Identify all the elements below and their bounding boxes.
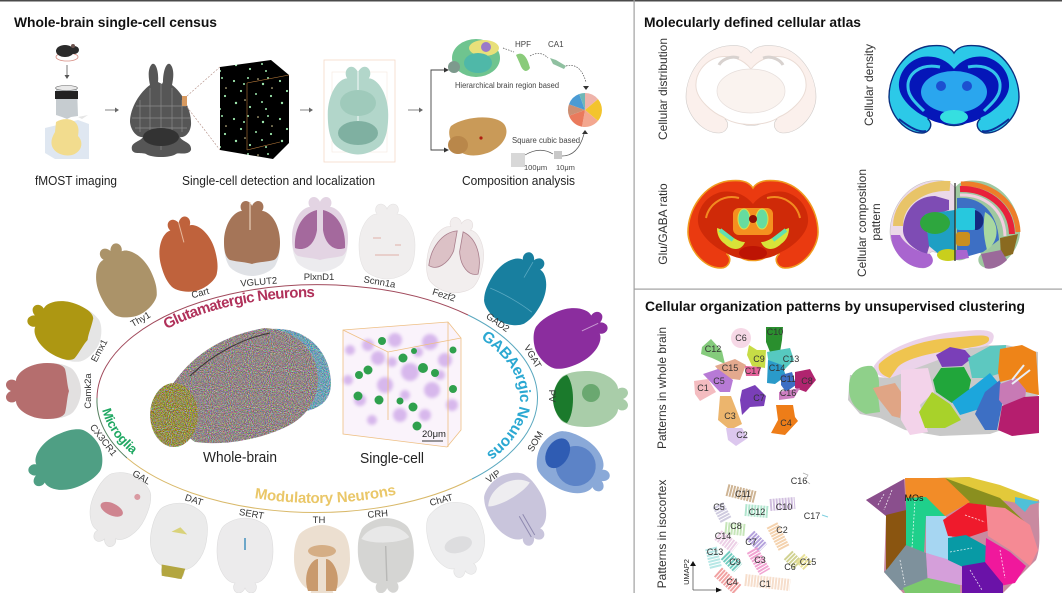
label: hierarchical brain region based: Hierarchical brain region based <box>455 81 559 90</box>
heading: Microglia: Microglia <box>102 408 136 454</box>
brain: Camk2a <box>6 363 81 419</box>
cluster plot: whole brain UMAP: C7 <box>753 393 765 403</box>
label: VGAT: VGAT <box>521 343 543 371</box>
cluster plot: whole brain UMAP: C15 <box>722 363 738 373</box>
label: Emx1: Emx1 <box>89 338 110 364</box>
cluster plot: whole brain UMAP: C8 <box>801 376 813 386</box>
cluster plot: whole brain UMAP: C13 <box>783 354 799 364</box>
cluster plot: whole brain UMAP: C17 <box>745 366 761 376</box>
label: VIP: VIP <box>484 468 503 486</box>
cluster plot: isocortex UMAP: C2 <box>776 525 788 535</box>
cluster plot: whole brain UMAP: C11 <box>780 374 796 384</box>
cluster plot: whole brain UMAP: C10 <box>767 327 783 337</box>
label: cellular distribution: Cellular distribution <box>656 38 670 140</box>
brain: Scnn1a <box>359 204 415 279</box>
brain: SOM <box>527 422 620 508</box>
icon: HPF and CA1 regions <box>503 40 586 82</box>
panel: cellular organization patterns <box>645 298 1040 593</box>
label: ChAT: ChAT <box>429 492 454 509</box>
cluster plot: isocortex UMAP: C11 <box>735 489 751 499</box>
icon: fMOST objective and sample block <box>45 86 89 159</box>
brain: VGAT <box>525 295 616 377</box>
cluster plot: isocortex UMAP: C12 <box>749 507 765 517</box>
label: Fezf2: Fezf2 <box>431 287 457 305</box>
cluster plot: isocortex UMAP: C13 <box>707 547 723 557</box>
icon: cube crops <box>511 134 584 172</box>
cluster plot: whole brain UMAP: C14 <box>769 363 785 373</box>
cluster plot: isocortex UMAP: C3 <box>754 555 766 565</box>
cluster plot: isocortex UMAP: C5 <box>713 502 725 512</box>
brain: DAT <box>144 499 212 582</box>
arc: GABAergic section <box>468 315 537 479</box>
icon: translucent green brain in box <box>324 60 395 162</box>
coronal map: Glu/GABA ratio <box>688 181 818 268</box>
label: cellular composition pattern: pattern <box>869 203 883 241</box>
arrow: imaging to detection <box>105 108 119 112</box>
cluster plot: isocortex UMAP: C9 <box>729 557 741 567</box>
arrow: mouse to microscope <box>64 65 70 79</box>
label: square cubic based: Square cubic based <box>512 136 580 145</box>
caption: Whole-brain: Whole-brain <box>203 449 277 466</box>
label: PlxnD1: PlxnD1 <box>304 272 334 283</box>
label: GAD2: GAD2 <box>484 311 511 335</box>
icon: cube crops: 100μm <box>524 163 547 172</box>
label: PV: PV <box>546 390 557 403</box>
label: patterns in isocortex: Patterns in isocortex <box>655 480 669 588</box>
brain: Cart <box>150 211 224 298</box>
label: TH: TH <box>313 515 325 526</box>
icon: cube crops: 10μm <box>556 163 575 172</box>
label: VGLUT2: VGLUT2 <box>240 275 278 290</box>
caption: fMOST imaging: fMOST imaging <box>35 174 117 188</box>
panel: whole-brain single-cell census <box>6 14 628 593</box>
pie chart: composition <box>568 93 602 127</box>
brain: VGLUT2 <box>224 201 280 276</box>
cluster plot: isocortex UMAP: C1 <box>759 579 771 589</box>
cluster plot: whole brain UMAP: C1 <box>697 383 709 393</box>
label: Glu/GABA ratio: Glu/GABA ratio <box>656 183 670 265</box>
brain: CX3CR1 <box>20 421 111 503</box>
brain: GAL <box>77 464 159 555</box>
arrow: to composition analysis <box>408 108 423 112</box>
cluster plot: whole brain UMAP <box>694 327 816 446</box>
label: patterns in whole brain: Patterns in whole brain <box>655 327 669 449</box>
icon: hierarchical region brain <box>448 39 500 77</box>
label: Thy1: Thy1 <box>129 310 153 330</box>
arrows: into pie chart <box>582 86 589 134</box>
region map: isocortex flatmap <box>866 477 1040 593</box>
heading: Glutamatergic Neurons: Glutamatergic Neurons <box>164 289 314 328</box>
arc: microglia section <box>97 398 127 458</box>
label: Camk2a: Camk2a <box>83 373 94 409</box>
caption: single-cell detection: Single-cell detection and localization <box>182 174 375 188</box>
brain: SERT <box>217 518 273 593</box>
brain: VIP <box>475 463 561 556</box>
cluster plot: whole brain UMAP: C3 <box>724 411 736 421</box>
coronal map: cellular density <box>889 46 1019 133</box>
heading: GABAergic Neurons: GABAergic Neurons <box>483 332 531 459</box>
cluster plot: whole brain UMAP: C12 <box>705 344 721 354</box>
image: whole-brain cell point cloud <box>150 328 331 447</box>
cluster plot: isocortex UMAP <box>707 473 828 590</box>
label: CX3CR1: CX3CR1 <box>87 422 119 459</box>
cluster plot: isocortex UMAP: C17 <box>804 511 820 521</box>
cluster plot: isocortex UMAP: C10 <box>776 502 792 512</box>
region map: isocortex flatmap: MOs <box>904 493 924 503</box>
label: SERT: SERT <box>238 507 265 522</box>
label: Cart: Cart <box>190 286 211 301</box>
heading: molecular atlas: Molecularly defined cellular atlas <box>644 14 861 30</box>
label: cellular density: Cellular density <box>862 44 876 126</box>
label: cellular composition pattern <box>855 169 883 277</box>
coronal map: cellular distribution <box>686 46 816 133</box>
label: CRH: CRH <box>367 508 389 521</box>
arrow: branching connector <box>431 68 449 152</box>
brain: PlxnD1 <box>292 197 348 272</box>
axes: UMAP: UMAP2 <box>682 559 691 585</box>
heading: organization patterns: Cellular organization patterns by unsupervised clustering <box>645 298 1025 314</box>
label: cellular composition pattern: Cellular composition <box>855 169 869 277</box>
image: single-cell volume <box>343 322 461 447</box>
panel: molecularly defined cellular atlas <box>644 14 1020 277</box>
cluster plot: isocortex UMAP: C14 <box>715 531 731 541</box>
region map: sagittal whole brain <box>848 330 1039 436</box>
cluster plot: isocortex UMAP: C6 <box>784 562 796 572</box>
cluster plot: isocortex UMAP: C15 <box>800 557 816 567</box>
icon: grayscale whole brain <box>130 64 191 157</box>
arrow: detection to reconstruction <box>300 108 313 112</box>
cluster plot: whole brain UMAP: C9 <box>753 354 765 364</box>
image: black detection volume with cells <box>220 60 289 159</box>
cluster plot: whole brain UMAP: C6 <box>735 333 747 343</box>
heading: whole-brain census: Whole-brain single-cell census <box>14 14 217 30</box>
cluster plot: isocortex UMAP: C8 <box>730 521 742 531</box>
icon: HPF and CA1 regions: HPF <box>515 40 531 49</box>
brain: PV <box>553 371 628 427</box>
cluster plot: isocortex UMAP: C7 <box>745 537 757 547</box>
heading: Modulatory Neurons: Modulatory Neurons <box>255 487 396 506</box>
label: SOM: SOM <box>526 430 546 454</box>
icon: HPF and CA1 regions: CA1 <box>548 40 564 49</box>
cluster plot: whole brain UMAP: C4 <box>780 418 792 428</box>
brain: Thy1 <box>83 235 165 326</box>
cluster plot: isocortex UMAP: C16 <box>791 476 807 486</box>
brain: Emx1 <box>19 288 110 370</box>
cluster plot: whole brain UMAP: C2 <box>736 430 748 440</box>
coronal map: cellular composition pattern <box>890 181 1020 269</box>
scale bar: 20 micrometres: 20μm <box>422 429 446 440</box>
brain: GAD2 <box>475 242 561 335</box>
caption: composition analysis: Composition analysis <box>462 174 575 188</box>
brain: ChAT <box>420 496 494 583</box>
cluster plot: whole brain UMAP: C16 <box>780 388 796 398</box>
brain: TH <box>294 525 350 593</box>
cluster plot: whole brain UMAP: C5 <box>713 376 725 386</box>
caption: Single-cell: Single-cell <box>360 450 424 467</box>
icon: golden brain <box>448 117 506 155</box>
zoom lines to cube <box>187 67 220 150</box>
brain: Fezf2 <box>422 214 490 297</box>
icon: mouse on stage <box>56 44 79 61</box>
arc: modulatory section <box>127 458 472 513</box>
label: DAT: DAT <box>183 493 204 509</box>
brain: CRH <box>357 517 415 593</box>
label: GAL: GAL <box>130 468 152 487</box>
cluster plot: isocortex UMAP: C4 <box>726 577 738 587</box>
arc: glutamatergic section <box>97 285 468 398</box>
label: Scnn1a: Scnn1a <box>363 274 397 291</box>
axes: UMAP <box>682 559 722 592</box>
